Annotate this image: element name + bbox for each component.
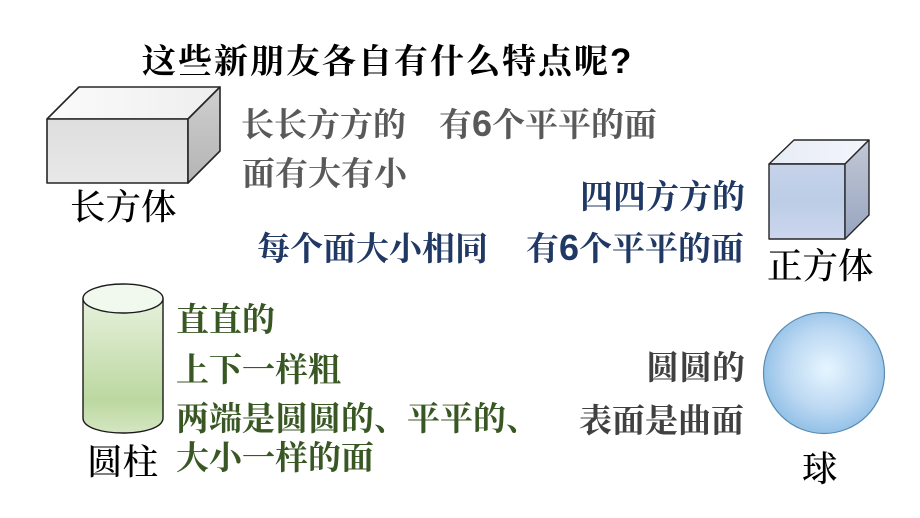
text: sphere feature 1: 圆圆的 (646, 342, 745, 389)
text: cylinder feature 4: 大小一样的面 (176, 432, 374, 479)
label: sphere: 球 (802, 441, 838, 492)
label: cylinder: 圆柱 (87, 434, 158, 485)
text: cube feature 2: 每个面大小相同 (257, 223, 488, 270)
label: cube: 正方体 (767, 238, 874, 289)
icon: cylinder (83, 284, 163, 433)
text: cylinder feature 3: 两端是圆圆的、平平的、 (176, 393, 539, 440)
text: cube feature 3: 有6个平平的面 (526, 223, 744, 270)
text: cuboid features line 2: 面有大有小 (242, 148, 407, 195)
label: cuboid: 长方体 (70, 179, 177, 230)
text: cuboid features line 1a: 长长方方的 (241, 99, 406, 146)
icon: cube (769, 140, 869, 239)
icon: sphere (764, 312, 884, 434)
text: cuboid features line 1b: 有6个平平的面 (439, 99, 657, 146)
icon: cuboid (47, 87, 220, 183)
text: sphere feature 2: 表面是曲面 (579, 395, 744, 442)
text: cylinder feature 1: 直直的 (176, 294, 275, 341)
text: cube feature 1: 四四方方的 (580, 171, 745, 218)
text: cylinder feature 2: 上下一样粗 (176, 344, 341, 391)
title: 这些新朋友各自有什么特点呢? (142, 34, 631, 83)
